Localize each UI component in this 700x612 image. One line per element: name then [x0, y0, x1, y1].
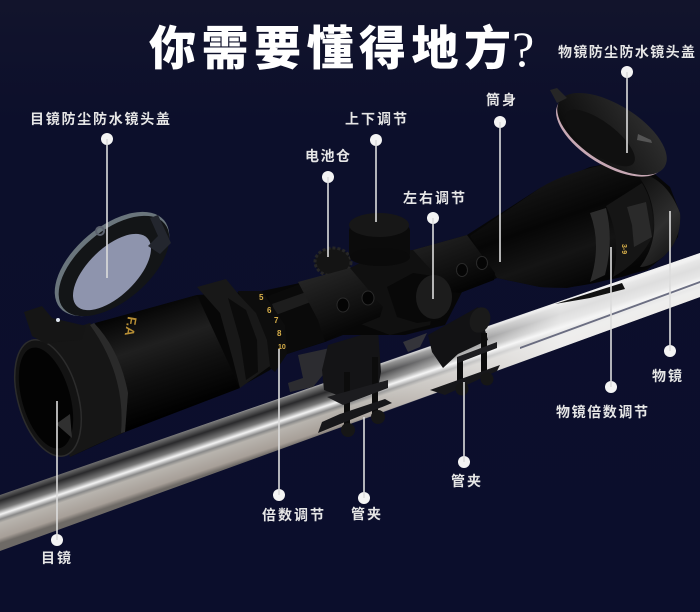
- eyepiece housing: [3, 323, 128, 464]
- mid tube: [268, 282, 330, 354]
- elevation turret: [349, 213, 410, 266]
- eyepiece body: [95, 279, 287, 432]
- label: left tube clamp: [351, 417, 381, 522]
- label: eyepiece dust cover: [30, 111, 170, 278]
- label: eyepiece dust cover: 目镜防尘防水镜头盖: [30, 111, 170, 127]
- eyepiece lens cap: [36, 192, 188, 336]
- label: eyepiece: [41, 401, 71, 566]
- scope logo: F.A: [122, 315, 140, 338]
- label: right tube clamp: 管夹: [451, 473, 481, 489]
- turret housing: [350, 250, 440, 335]
- objective outer cap: [636, 173, 680, 267]
- lower plate: [318, 399, 392, 433]
- vertical bolts: [344, 372, 350, 428]
- front mount clamp: [403, 304, 500, 396]
- eyepiece body: 7: [274, 316, 279, 325]
- knurled grip: [197, 279, 270, 388]
- label: objective dust cover: 物镜防尘防水镜头盖: [558, 44, 695, 60]
- label: objective lens: 物镜: [652, 368, 682, 384]
- label: battery compartment: 电池仓: [305, 148, 350, 164]
- eyepiece cap hinge: [24, 306, 86, 344]
- objective marking: 3-9: [620, 244, 627, 254]
- upper bar: [327, 380, 388, 405]
- title: 你需要懂得地方: [149, 22, 511, 75]
- eyepiece body: 5: [259, 293, 264, 302]
- front mount ring: [413, 235, 495, 293]
- steel rail: [0, 253, 700, 551]
- label: objective lens: [652, 211, 682, 384]
- label: objective magnification adjustment: 物镜倍数调节: [556, 404, 648, 420]
- label: left tube clamp: 管夹: [351, 506, 381, 522]
- label: battery compartment: [305, 148, 350, 257]
- centre block: [322, 330, 381, 398]
- label: objective dust cover: [558, 44, 695, 153]
- label: magnification adjustment: [262, 349, 324, 523]
- objective bell: [470, 162, 680, 288]
- rear mount clamp: [288, 330, 392, 437]
- objective sheen band: [590, 208, 610, 282]
- rear mount ring: [298, 268, 383, 342]
- label: windage adjustment: 左右调节: [403, 190, 465, 206]
- windage turret: [387, 273, 452, 323]
- label: magnification adjustment: 倍数调节: [262, 507, 324, 523]
- label: tube body: 筒身: [486, 92, 516, 108]
- scope silhouette: [70, 162, 680, 457]
- label: eyepiece: 目镜: [41, 550, 71, 566]
- label: right tube clamp: [451, 382, 481, 489]
- battery compartment knob: [315, 248, 351, 276]
- objective lens cap: [543, 77, 680, 193]
- objective focus ring: [606, 183, 653, 277]
- title: ?: [512, 21, 534, 77]
- left bracket: [288, 348, 330, 392]
- label: elevation adjustment: 上下调节: [345, 111, 407, 127]
- label: windage adjustment: [403, 190, 465, 299]
- eyepiece body: 10: [278, 344, 286, 351]
- eyepiece body: 6: [267, 306, 272, 315]
- eyepiece body: 8: [277, 329, 282, 338]
- label: tube body: [486, 92, 516, 262]
- zoom ring with numbers: [238, 291, 287, 372]
- label: objective magnification adjustment: [556, 247, 648, 420]
- label: elevation adjustment: [345, 111, 407, 222]
